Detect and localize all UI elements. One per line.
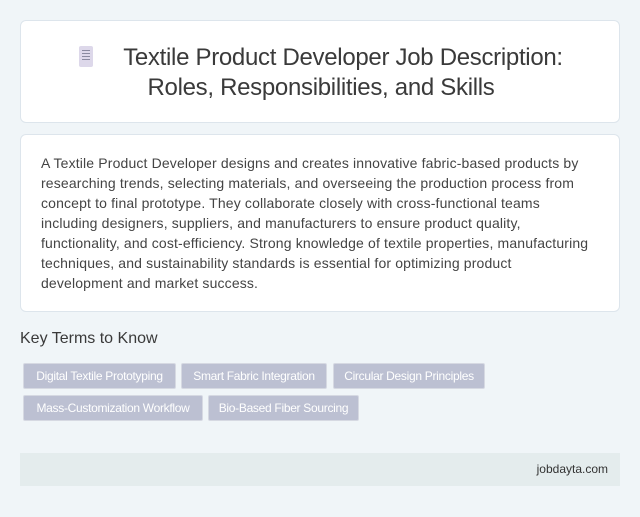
title: Textile Product Developer Job Description: Roles, Responsibilities, and Skills bbox=[123, 44, 563, 101]
footer bbox=[20, 453, 620, 486]
key terms tags: Digital Textile Prototyping bbox=[36, 369, 163, 383]
description text: A Textile Product Developer designs and creates innovative fabric-based products by researching trends, selecting materials, and overseeing the production process from concept to final prototype. They collaborate closely with cross-functional teams including designers, suppliers, and manufacturers to ensure product quality, functionality, and cost-efficiency. Strong knowledge of textile properties, manufacturing techniques, and sustainability standards is essential for optimizing product development and market success. bbox=[41, 155, 588, 291]
footer: jobdayta.com bbox=[537, 462, 608, 476]
key terms tags: Circular Design Principles bbox=[344, 369, 474, 383]
title card bbox=[20, 20, 620, 123]
key terms tags: Smart Fabric Integration bbox=[193, 369, 315, 383]
key terms tags: Bio-Based Fiber Sourcing bbox=[219, 401, 348, 415]
key terms heading: Key Terms to Know bbox=[20, 330, 158, 347]
description card bbox=[20, 134, 620, 312]
key terms tags: Mass-Customization Workflow bbox=[36, 401, 190, 415]
